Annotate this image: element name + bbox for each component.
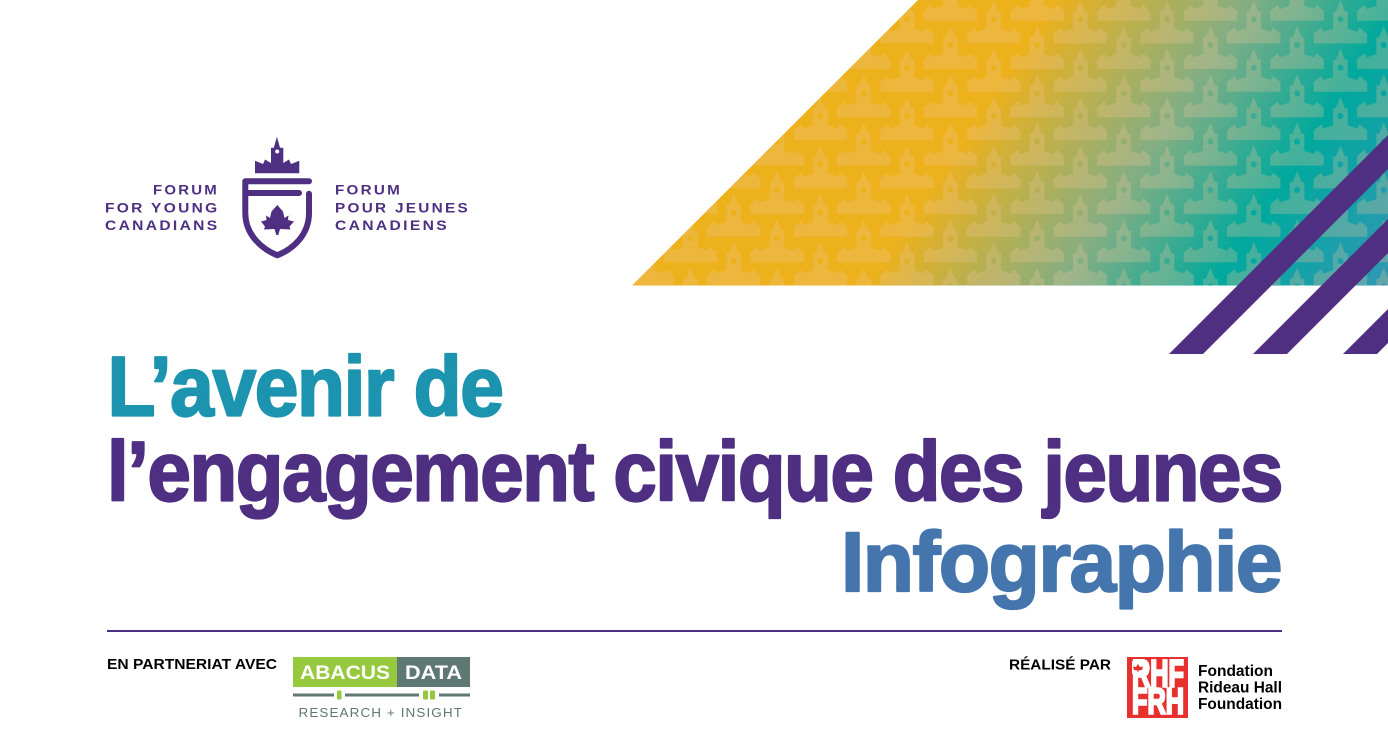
- logo: Rideau Hall Foundation: [1127, 654, 1282, 722]
- logo: Rideau Hall Foundation: Rideau Hall: [1198, 680, 1282, 696]
- title line 1: L’avenir de: [108, 339, 502, 433]
- logo: Abacus Data: DATA: [405, 662, 462, 684]
- logo: Forum for Young Canadians: [105, 137, 470, 255]
- label: partner: EN PARTNERIAT AVEC: [107, 657, 277, 673]
- label: produced by: RÉALISÉ PAR: [1009, 656, 1111, 674]
- logo: Rideau Hall Foundation: Fondation: [1198, 663, 1273, 680]
- icon: crest with tower and maple leaf: [245, 137, 309, 255]
- diagonal purple stripes: [1169, 135, 1388, 354]
- logo: Abacus Data: ABACUS: [300, 662, 390, 684]
- logo: Rideau Hall Foundation: RHF: [1132, 654, 1184, 696]
- logo text: French: POUR JEUNES: [335, 200, 470, 216]
- subtitle: Infographie: Infographie: [841, 515, 1281, 609]
- footer divider: [107, 630, 1282, 632]
- banner: gradient trapezoid with tower pattern: [632, 0, 1388, 286]
- logo: Abacus Data: [293, 657, 470, 720]
- title: [107, 339, 1282, 609]
- logo text: English: FORUM: [153, 182, 219, 198]
- icon: red maple leaf: [1133, 664, 1143, 672]
- logo: Abacus Data: RESEARCH + INSIGHT: [298, 706, 463, 720]
- title line 2: l’engagement civique des jeunes: [107, 424, 1282, 518]
- logo text: French: CANADIENS: [335, 218, 449, 233]
- logo: Rideau Hall Foundation: FRH: [1132, 680, 1184, 722]
- logo: Rideau Hall Foundation: Foundation: [1198, 696, 1282, 713]
- logo text: English: CANADIANS: [105, 218, 220, 233]
- logo text: French: FORUM: [335, 182, 402, 198]
- logo text: English: [105, 182, 220, 233]
- logo text: English: FOR YOUNG: [105, 200, 220, 216]
- logo text: French: [335, 182, 470, 233]
